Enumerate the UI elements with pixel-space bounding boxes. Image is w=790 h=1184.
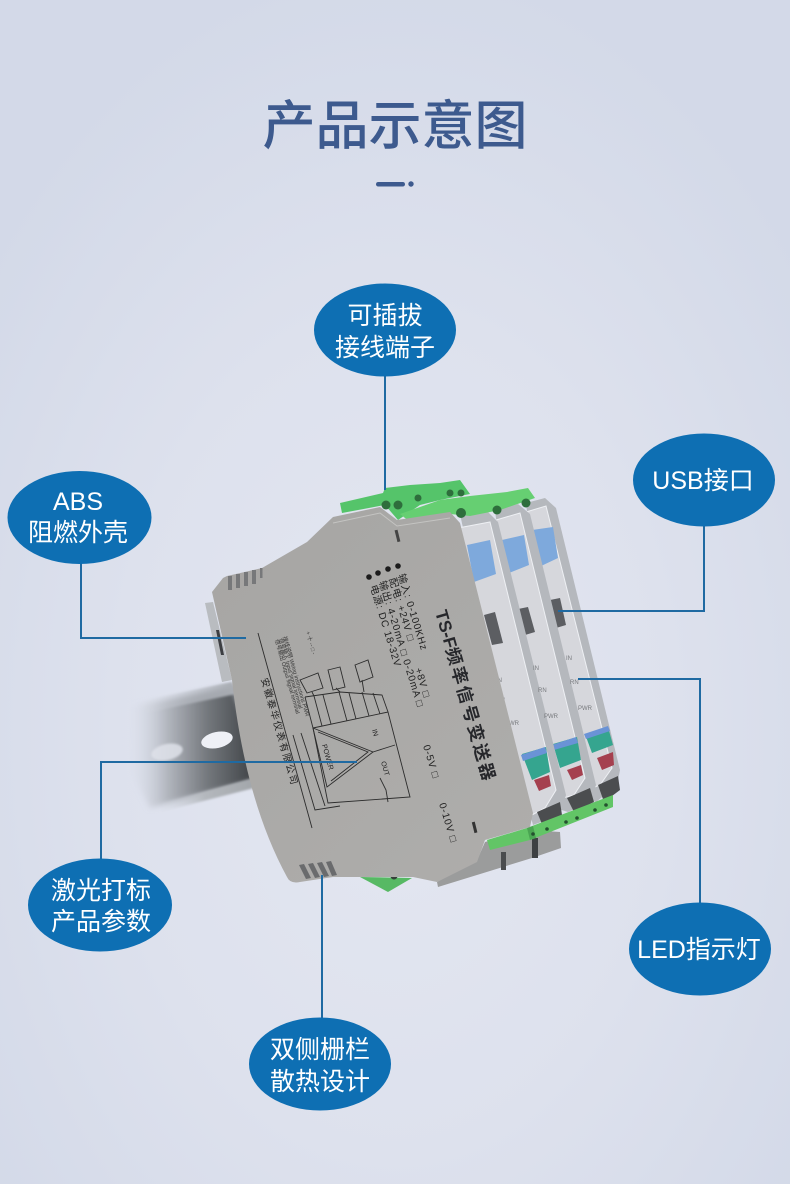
panel spec text: 电源: DC 18-32V [367, 583, 405, 669]
panel fine print: 信号输出 Output signal terminal [273, 638, 302, 715]
wiring diagram [258, 633, 410, 828]
module 1 cover [458, 510, 566, 825]
panel spec text: 输出: 4-20mA □ 0-20mA □ [376, 579, 427, 709]
callout: laser marking: 激光打标 [51, 877, 151, 905]
callout: heat vents: 双侧栅栏 [270, 1036, 370, 1064]
panel spec text: 0-10V □ [436, 802, 459, 844]
callout: laser marking: 产品参数 [51, 908, 151, 936]
callout: USB port [633, 434, 775, 526]
title: 产品示意图 [262, 97, 528, 156]
callout: LED indicator: LED指示灯 [637, 936, 761, 964]
callout line: terminals [384, 370, 386, 490]
title accent mark [376, 181, 414, 187]
cover labels [496, 656, 593, 727]
callout line: vents [321, 875, 323, 1025]
callout: heat vents: 散热设计 [270, 1068, 370, 1096]
cover labels: IN [533, 666, 539, 672]
callout: ABS shell [8, 471, 152, 564]
panel spec text [367, 572, 459, 844]
din rail [125, 682, 265, 812]
cover labels: PWR [505, 721, 520, 727]
callout: laser marking [28, 858, 172, 952]
cover labels: RN [570, 680, 579, 686]
bottom grey housing [437, 830, 561, 887]
diagram labels [320, 729, 390, 777]
panel fine print [273, 630, 318, 717]
manufacturer name: 安徽泰华仪表有限公司 [258, 677, 301, 788]
panel spec text: 输入: 0-100KHz [395, 572, 431, 652]
cover labels: IN [499, 698, 505, 704]
panel fine print: + 十 -- □ - [304, 630, 318, 655]
callout line: laser marking [101, 762, 357, 865]
callout: pluggable terminals [314, 284, 456, 376]
diagram labels: OUT [379, 761, 390, 777]
vents top [228, 568, 262, 590]
cover labels: IN [496, 678, 502, 684]
callout: ABS shell: 阻燃外壳 [28, 519, 128, 547]
callout: pluggable terminals: 可插拔 [347, 302, 423, 330]
panel fine print: 信号输入 Input signal terminal [277, 637, 305, 709]
panel spec text: 0-5V □ [420, 744, 441, 780]
indicator dots [366, 563, 401, 580]
cover labels: PWR [578, 706, 593, 712]
top terminals [340, 480, 535, 522]
diagram labels: POWER [320, 744, 334, 771]
cover labels: PWR [544, 714, 559, 720]
module 2 cover [495, 504, 596, 812]
callout: USB port: USB接口 [652, 467, 754, 495]
callout: pluggable terminals: 接线端子 [335, 334, 435, 362]
bottom terminals [360, 795, 613, 892]
diagram labels: IN [370, 729, 379, 737]
callout line: LED [578, 679, 700, 910]
product name: TS-F频率信号变送器 [431, 608, 500, 785]
panel fine print: 接线说明 Wiring instructions PWR [281, 635, 312, 717]
callout: LED indicator [629, 902, 771, 996]
callout line: ABS [81, 560, 246, 638]
panel spec text: 配电: +24V □ [386, 576, 418, 643]
panel spec text: +8V □ [412, 667, 432, 699]
callout: ABS shell: ABS [53, 488, 103, 516]
device front panel [212, 507, 533, 882]
module 3 cover [526, 498, 620, 802]
cover labels: IN [566, 656, 572, 662]
cover labels: RN [538, 688, 547, 694]
din clip [205, 602, 232, 682]
vents bottom [299, 861, 337, 879]
callout: heat vents [249, 1018, 391, 1110]
callout line: USB [558, 520, 704, 611]
